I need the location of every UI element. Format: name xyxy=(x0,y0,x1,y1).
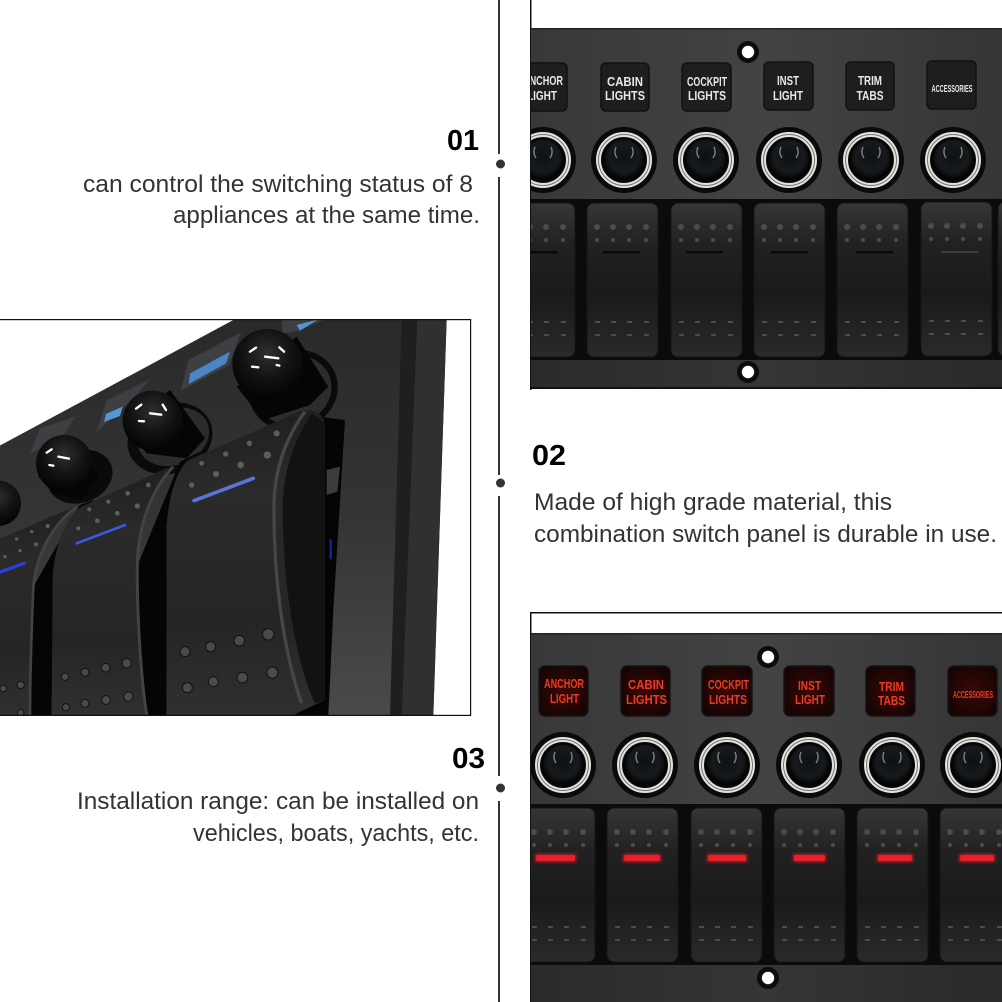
lit switch labels xyxy=(544,679,993,705)
switch labels: TABS xyxy=(856,89,884,103)
rocker 2 xyxy=(52,467,170,715)
lit switch labels: LIGHTS xyxy=(709,693,747,707)
rocker switches xyxy=(524,808,1002,962)
switch labels: ANCHOR xyxy=(523,74,563,88)
feature 02 text: 02 xyxy=(532,440,566,472)
feature 02 text xyxy=(532,440,997,548)
lit switch labels: TABS xyxy=(878,694,905,708)
switch labels: CABIN xyxy=(607,75,643,89)
lit switch labels: ANCHOR xyxy=(544,677,584,691)
feature 03 text xyxy=(77,743,485,847)
lit switch labels: LIGHTS xyxy=(626,693,667,707)
toggle switches xyxy=(530,732,1002,798)
lit switch labels: INST xyxy=(798,679,821,693)
toggle knobs xyxy=(0,329,328,526)
rocker switches xyxy=(504,202,1002,357)
blue indicator lights xyxy=(0,478,331,573)
lit switch labels: COCKPIT xyxy=(708,678,749,692)
switch labels: LIGHT xyxy=(527,89,557,103)
lit switch labels: TRIM xyxy=(879,680,904,694)
feature 03 text: vehicles, boats, yachts, etc. xyxy=(193,820,479,847)
switch labels: INST xyxy=(777,74,799,88)
toggle switches xyxy=(510,127,986,193)
feature 03 text: 03 xyxy=(452,743,485,775)
lit switch labels: LIGHT xyxy=(550,692,579,706)
red indicator lights xyxy=(535,854,995,862)
switch labels: LIGHTS xyxy=(605,89,645,103)
base plate xyxy=(0,319,447,715)
switch labels xyxy=(531,76,972,100)
panel: switch panel photo, lit red xyxy=(524,612,1002,1002)
rocker 1 xyxy=(0,507,75,715)
panel: angled close-up photo xyxy=(0,318,471,716)
black slots xyxy=(293,417,345,715)
feature 01 text: appliances at the same time. xyxy=(173,202,480,229)
lit switch labels: CABIN xyxy=(628,678,664,692)
switch labels: LIGHT xyxy=(773,89,803,103)
feature 01 text: can control the switching status of 8 xyxy=(83,171,473,198)
feature 02 text: Made of high grade material, this xyxy=(534,489,892,516)
feature 03 text: Installation range: can be installed on xyxy=(77,788,479,815)
feature 01 text xyxy=(83,125,480,229)
switch labels: COCKPIT xyxy=(687,75,727,89)
lit switch labels: LIGHT xyxy=(795,693,825,707)
panel: switch panel photo, unlit xyxy=(504,0,1002,390)
feature 01 text: 01 xyxy=(447,125,479,157)
switch labels: TRIM xyxy=(858,74,882,88)
mounting holes xyxy=(40,337,349,512)
rocker dots xyxy=(0,629,278,716)
backlit label tiles xyxy=(30,318,327,453)
feature 02 text: combination switch panel is durable in use. xyxy=(534,521,997,548)
timeline xyxy=(496,0,505,1002)
switch labels: LIGHTS xyxy=(688,89,726,103)
rocker 3 xyxy=(167,410,325,715)
